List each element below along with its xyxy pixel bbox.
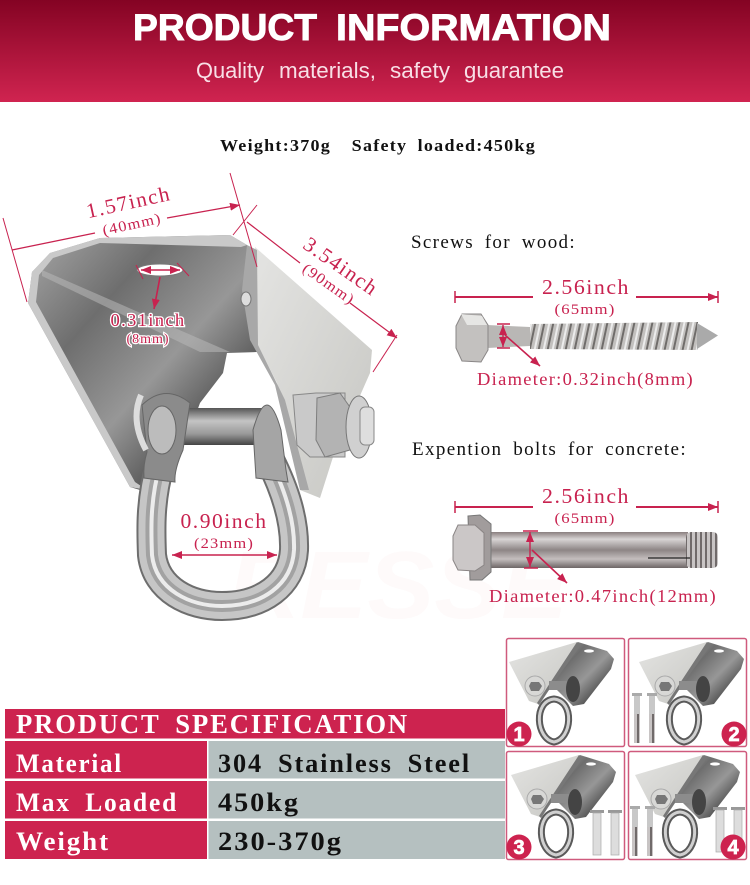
row: max loaded: Max Loaded xyxy=(16,788,178,817)
subtitle: Quality xyxy=(196,58,264,83)
dimension: hole 0.31inch: (8mm) xyxy=(126,332,170,347)
shackle eye right xyxy=(253,405,288,482)
row: material: 304 Stainless Steel xyxy=(218,749,471,778)
shackle eye left xyxy=(142,393,190,482)
option 4 thumbnail xyxy=(628,752,746,860)
title: PRODUCT xyxy=(133,7,317,48)
row: max loaded: 450kg xyxy=(218,788,300,817)
dimension: width 1.57inch xyxy=(3,173,257,302)
bolt dimensions: Diameter:0.47inch(12mm) xyxy=(489,586,717,607)
washer xyxy=(137,395,146,450)
option 2 thumbnail: 2 xyxy=(728,724,740,746)
nut and bolt end xyxy=(293,393,345,457)
subtitle: safety xyxy=(390,58,450,83)
row: weight xyxy=(5,821,505,859)
header banner xyxy=(0,0,750,102)
dimension: length 3.54inch xyxy=(247,222,397,372)
subtitle: materials, xyxy=(279,58,376,83)
wood screw dimensions: 2.56inch xyxy=(542,275,630,299)
dimension: length 3.54inch: 3.54inch xyxy=(299,232,383,301)
hanger bracket illustration xyxy=(28,235,374,606)
shackle ring xyxy=(151,460,294,606)
row: material xyxy=(5,741,505,778)
title: INFORMATION xyxy=(336,7,611,48)
wood screw drawing xyxy=(456,314,718,362)
wood screw dimensions: Diameter:0.32inch(8mm) xyxy=(477,369,694,390)
row: weight: 230-370g xyxy=(218,827,343,856)
cross pin xyxy=(180,408,265,445)
table heading: PRODUCT SPECIFICATION xyxy=(16,709,409,739)
watermark: RESSE xyxy=(228,532,571,639)
wood screw dimensions xyxy=(455,275,718,390)
option 3 thumbnail: 3 xyxy=(513,837,525,859)
dimension: shackle 0.90inch xyxy=(172,509,277,555)
specification table xyxy=(5,709,505,859)
title xyxy=(133,7,611,48)
left plate xyxy=(28,235,258,492)
dimension: shackle 0.90inch: 0.90inch xyxy=(180,509,268,533)
bolt dimensions: (65mm) xyxy=(554,511,616,527)
row: weight: Weight xyxy=(16,827,110,856)
option 4 thumbnail: 4 xyxy=(727,837,739,859)
bolt dimensions: 2.56inch xyxy=(542,484,630,508)
option 1 thumbnail xyxy=(506,638,624,746)
row: material: Material xyxy=(16,749,123,778)
heading: expansion bolts: Expention bolts for concrete: xyxy=(412,439,687,460)
dimension: hole 0.31inch xyxy=(110,263,189,347)
row: max loaded xyxy=(5,781,505,818)
subtitle: guarantee xyxy=(464,58,564,83)
mounting hole xyxy=(137,264,183,276)
dimension: hole 0.31inch: 0.31inch xyxy=(110,310,186,330)
dimension: shackle 0.90inch: (23mm) xyxy=(194,536,254,552)
expansion bolt drawing xyxy=(453,515,718,580)
option 1 thumbnail: 1 xyxy=(513,724,525,746)
subtitle xyxy=(196,58,564,83)
option 2 thumbnail xyxy=(628,638,746,746)
option 3 thumbnail xyxy=(506,752,624,860)
dimension: width 1.57inch: 1.57inch xyxy=(84,181,173,223)
bolt dimensions xyxy=(455,484,718,607)
dimension: width 1.57inch: (40mm) xyxy=(101,211,163,239)
weight and load summary: Weight:370g Safety loaded:450kg xyxy=(220,136,536,155)
right plate xyxy=(255,247,372,498)
heading: screws for wood: Screws for wood: xyxy=(411,232,576,253)
wood screw dimensions: (65mm) xyxy=(554,302,616,318)
dimension: length 3.54inch: (90mm) xyxy=(299,261,357,308)
